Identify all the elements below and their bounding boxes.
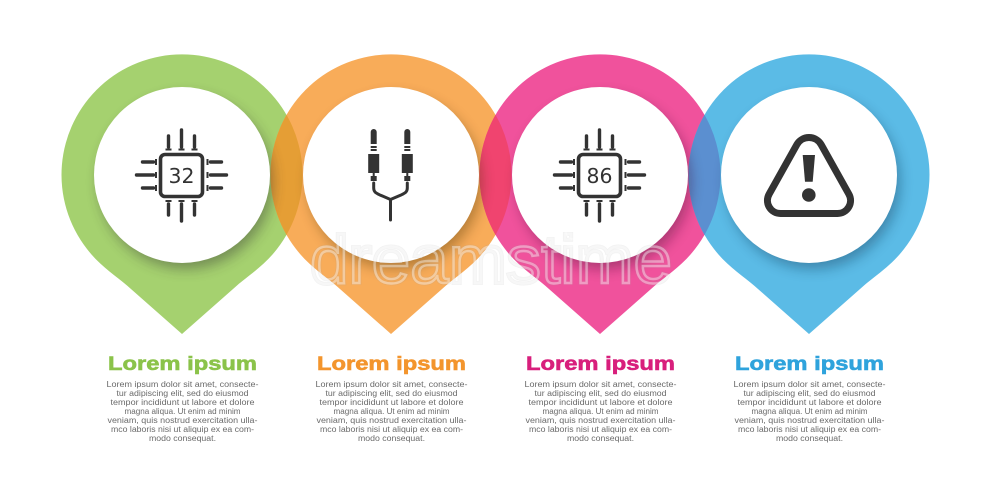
body text: Lorem ipsum dolor sit amet, consecte- xyxy=(524,380,677,389)
body text: modo consequat. xyxy=(358,434,425,443)
heading: Lorem ipsum xyxy=(108,353,257,375)
body text xyxy=(106,380,259,443)
shadow: green circle xyxy=(99,95,273,269)
heading: Lorem ipsum xyxy=(317,353,466,375)
body text: veniam, quis nostrud exercitation ulla- xyxy=(734,416,885,425)
white circle: pink pin xyxy=(512,87,688,263)
icon: 32-bit processor chip: 32 xyxy=(168,164,194,188)
overlap: pink and blue xyxy=(688,115,720,235)
icon: 86 processor chip xyxy=(554,130,644,221)
overlap: green and orange xyxy=(270,115,302,234)
panel: pink pin base xyxy=(480,54,720,334)
heading: Lorem ipsum xyxy=(735,353,884,375)
body text: mco laboris nisi ut aliquip ex ea com- xyxy=(529,425,672,434)
panel: orange pin base xyxy=(270,54,512,334)
shadow: orange circle xyxy=(308,95,482,269)
body text xyxy=(734,380,886,443)
watermark: dreamstime xyxy=(310,222,672,298)
white circle: green pin xyxy=(94,87,270,263)
icon: 86 processor chip: 86 xyxy=(586,164,612,188)
body text: tempor incididunt ut labore et dolore xyxy=(738,398,882,407)
body text: magna aliqua. Ut enim ad minim xyxy=(334,407,450,416)
icon: warning triangle xyxy=(767,138,851,214)
body text: modo consequat. xyxy=(149,434,216,443)
text block: green xyxy=(106,353,259,443)
body text: magna aliqua. Ut enim ad minim xyxy=(542,407,659,416)
text block: pink xyxy=(524,353,677,443)
body text: tur adipiscing elit, sed do eiusmod xyxy=(534,389,666,398)
body text: tempor incididunt ut labore et dolore xyxy=(528,398,673,407)
body text: veniam, quis nostrud exercitation ulla- xyxy=(526,416,676,425)
shadow: pink circle xyxy=(517,95,691,269)
body text: veniam, quis nostrud exercitation ulla- xyxy=(108,416,258,425)
heading: Lorem ipsum xyxy=(526,353,675,375)
body text: Lorem ipsum dolor sit amet, consecte- xyxy=(106,380,259,389)
overlap: orange and pink xyxy=(480,115,512,235)
body text: tempor incididunt ut labore et dolore xyxy=(320,398,464,407)
text block: orange xyxy=(316,353,468,443)
body text: modo consequat. xyxy=(567,434,634,443)
white circle: blue pin xyxy=(721,87,897,263)
body text xyxy=(316,380,468,443)
body text: Lorem ipsum dolor sit amet, consecte- xyxy=(316,380,468,389)
body text: mco laboris nisi ut aliquip ex ea com- xyxy=(320,425,463,434)
body text: mco laboris nisi ut aliquip ex ea com- xyxy=(738,425,881,434)
body text: Lorem ipsum dolor sit amet, consecte- xyxy=(734,380,886,389)
body text: magna aliqua. Ut enim ad minim xyxy=(752,407,868,416)
body text: veniam, quis nostrud exercitation ulla- xyxy=(316,416,467,425)
shadow: blue circle xyxy=(726,95,900,269)
panel: green pin base xyxy=(62,54,303,334)
body text xyxy=(524,380,677,443)
icon: audio jack splitter cable xyxy=(368,129,413,220)
body text: tempor incididunt ut labore et dolore xyxy=(110,398,255,407)
panel: blue pin base xyxy=(688,54,930,334)
icon: 32-bit processor chip xyxy=(136,130,226,221)
watermark: dreamstime xyxy=(310,222,672,298)
body text: tur adipiscing elit, sed do eiusmod xyxy=(744,389,876,398)
body text: tur adipiscing elit, sed do eiusmod xyxy=(326,389,458,398)
body text: magna aliqua. Ut enim ad minim xyxy=(124,407,241,416)
text block: blue xyxy=(734,353,886,443)
body text: modo consequat. xyxy=(776,434,843,443)
body text: tur adipiscing elit, sed do eiusmod xyxy=(116,389,248,398)
white circle: orange pin xyxy=(303,87,479,263)
body text: mco laboris nisi ut aliquip ex ea com- xyxy=(111,425,254,434)
